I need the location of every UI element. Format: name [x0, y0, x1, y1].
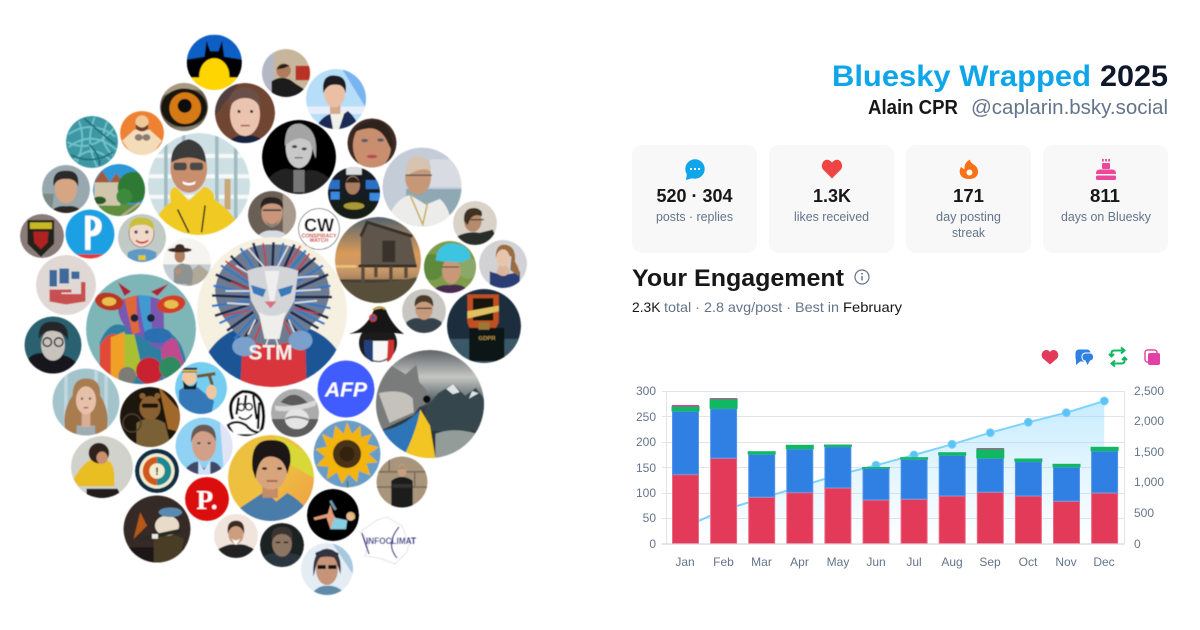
right axis labels: 1,500	[1134, 445, 1164, 459]
icon: birthday cake	[1096, 159, 1116, 180]
user name and handle	[868, 97, 1168, 119]
bar: Mar	[748, 452, 775, 544]
avatar: woman in blue	[479, 240, 527, 288]
icon: heart	[822, 160, 842, 178]
stat card: days on Bluesky	[1043, 145, 1168, 253]
left axis labels: 300	[636, 384, 656, 398]
stat card: day posting streak	[906, 145, 1031, 253]
user name and handle: Alain CPR	[868, 97, 959, 119]
stat card: day posting streak: 171	[953, 186, 984, 206]
avatar: castle	[93, 164, 149, 216]
avatar: gritty man	[260, 523, 304, 567]
bar: Jan	[672, 405, 699, 544]
stat card: likes received	[769, 145, 894, 253]
right axis labels: 500	[1134, 506, 1154, 520]
avatar: tintin captain	[175, 362, 227, 414]
avatar: rainbow cow	[86, 274, 196, 385]
stacked bars	[672, 398, 1118, 544]
title: Bluesky Wrapped	[832, 60, 1091, 93]
stat card: days on Bluesky: days on Bluesky	[1061, 209, 1151, 224]
right axis labels	[1134, 384, 1164, 551]
avatar: black and white woman	[262, 120, 336, 194]
avatar: AFP logo	[318, 360, 374, 418]
avatar: smiling man	[214, 514, 258, 558]
bar: Nov	[1053, 464, 1080, 544]
month labels: Sep	[979, 555, 1001, 569]
avatar: bald man with lanyard	[382, 148, 462, 228]
avatar: woman close-up	[348, 118, 396, 170]
avatar: asian man on gradient	[228, 435, 314, 521]
avatar: animal pilot	[120, 387, 180, 447]
engagement summary: total · 2.8 avg/post · Best in	[664, 299, 839, 315]
stat card: likes received: 1.3K	[813, 186, 851, 206]
icon: legend heart	[1042, 350, 1058, 364]
avatar: cameraman	[262, 49, 310, 97]
engagement summary	[632, 299, 902, 315]
left axis labels: 250	[636, 410, 656, 424]
bar: Jul	[901, 458, 928, 544]
avatar: man with round glasses	[24, 316, 82, 374]
month labels: Jun	[866, 555, 886, 569]
left axis labels	[636, 384, 656, 551]
bar: Apr	[786, 445, 813, 544]
left axis labels: 50	[643, 511, 656, 525]
stat card: day posting streak: day posting	[936, 209, 1001, 224]
right axis labels: 1,000	[1134, 475, 1164, 489]
left axis labels: 0	[649, 537, 656, 551]
avatar cluster	[20, 35, 527, 595]
avatar: man with glasses and jacket	[402, 289, 446, 333]
avatar: orange cartoon man	[120, 111, 164, 155]
bar: Jun	[862, 468, 890, 544]
avatar: man by stone wall	[376, 456, 428, 508]
avatar: blue hair	[419, 241, 479, 293]
avatar: lion mascot	[197, 237, 347, 387]
bar: Sep	[977, 448, 1004, 544]
icon: chat bubble	[685, 159, 705, 180]
bar: Aug	[939, 453, 966, 544]
legend icons	[1042, 348, 1160, 366]
avatar: asian man outdoors	[42, 165, 90, 213]
engagement summary: 2.3K	[632, 299, 661, 315]
avatar: side profile man	[453, 201, 497, 245]
avatar: yellow hoodie man	[148, 133, 250, 235]
avatar: judge with book	[447, 289, 521, 363]
avatar: man with glasses	[248, 191, 296, 239]
avatar: stilt hut at sunset	[335, 217, 421, 303]
cumulative line	[685, 401, 1104, 527]
avatar: wolf with ukrainian flag	[376, 350, 484, 458]
bar: Feb	[710, 398, 737, 544]
stat card: posts and replies: posts · replies	[656, 209, 733, 224]
avatar: fox soldier	[124, 496, 190, 564]
avatar: doodle woman	[222, 388, 270, 436]
month labels: Nov	[1055, 555, 1077, 569]
avatar: cowboy	[163, 238, 211, 286]
heading: Your Engagement: Your Engagement	[632, 265, 844, 292]
right axis labels: 0	[1134, 537, 1141, 551]
stat card: likes received: likes received	[794, 209, 869, 224]
x axis baseline	[662, 543, 1124, 545]
avatar: tv guest	[176, 418, 232, 474]
month labels: May	[827, 555, 849, 569]
left axis labels: 200	[636, 435, 656, 449]
month labels: Feb	[713, 555, 734, 569]
chart grid	[662, 391, 1124, 544]
avatar: fist logo	[36, 255, 96, 315]
cumulative area	[685, 401, 1104, 544]
avatar: man at tv wall	[328, 167, 380, 219]
avatar: orange eye	[160, 83, 208, 131]
avatar: yarn ball	[66, 116, 118, 168]
avatar: napoleon hat	[349, 307, 404, 362]
chart: monthly engagement	[636, 384, 1164, 569]
avatar: P logo blue	[66, 210, 114, 259]
avatar: totoro	[187, 35, 242, 94]
icon: info	[855, 270, 869, 284]
engagement summary: February	[843, 299, 902, 315]
month labels: Apr	[790, 555, 809, 569]
avatar: yoga woman	[307, 489, 359, 541]
avatar: young man	[215, 83, 275, 143]
avatar: target clock logo	[135, 449, 179, 493]
stat card: day posting streak: streak	[952, 225, 985, 240]
avatar: man with black glasses	[301, 543, 353, 595]
avatar: CW logo	[297, 207, 341, 251]
avatar: P logo red	[185, 477, 229, 521]
bar: May	[824, 445, 851, 544]
avatar: news anchor	[306, 69, 366, 129]
left axis labels: 150	[636, 461, 656, 475]
icon: flame	[960, 160, 978, 179]
icon: legend quotes	[1145, 350, 1160, 365]
bar: Oct	[1015, 459, 1042, 544]
month labels: Jul	[906, 555, 922, 569]
icon: legend reposts	[1109, 348, 1127, 366]
month labels: Aug	[941, 555, 963, 569]
month labels	[675, 555, 1115, 569]
month labels: Mar	[751, 555, 772, 569]
right axis labels: 2,500	[1134, 384, 1164, 398]
cumulative points	[872, 397, 1108, 469]
stat card: days on Bluesky: 811	[1090, 186, 1120, 206]
title: 2025	[1100, 60, 1168, 93]
avatar: woman in yellow	[71, 436, 133, 498]
bar: Dec	[1091, 447, 1118, 544]
avatar: infoclimat logo	[360, 517, 416, 564]
avatar: cartoon boy	[118, 214, 166, 262]
icon: legend replies	[1076, 350, 1094, 365]
avatar: medic patch	[20, 214, 64, 258]
avatar: sunflower	[314, 420, 380, 488]
avatar: P logo red: P.	[196, 484, 218, 515]
avatar: infoclimat logo: INFOCLIMAT	[366, 536, 416, 546]
left axis labels: 100	[636, 486, 656, 500]
month labels: Dec	[1093, 555, 1115, 569]
month labels: Oct	[1019, 555, 1038, 569]
stat card: posts and replies	[632, 145, 757, 253]
avatar: blonde woman	[52, 368, 120, 437]
stat card: posts and replies: 520 · 304	[656, 186, 732, 206]
right axis labels: 2,000	[1134, 414, 1164, 428]
month labels: Jan	[675, 555, 695, 569]
avatar: gray hat photo	[271, 389, 319, 438]
user name and handle: @caplarin.bsky.social	[971, 97, 1168, 119]
